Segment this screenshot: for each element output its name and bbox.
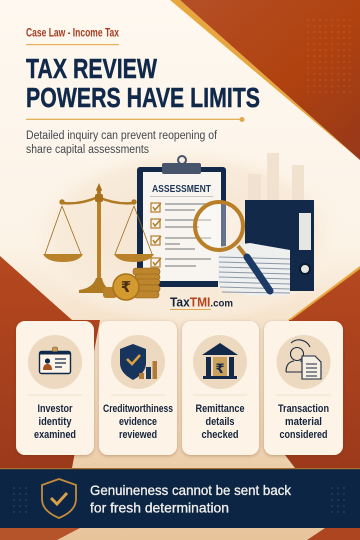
label: checked <box>202 429 238 441</box>
label <box>34 403 76 441</box>
label: Transaction <box>278 403 329 415</box>
icon: person and document <box>276 335 330 389</box>
subtitle <box>26 130 218 156</box>
label: Remittance <box>196 403 244 415</box>
icon: coins with rupee: ₹ <box>121 278 131 296</box>
icon: coins with rupee <box>103 268 160 300</box>
panel: remittance <box>182 321 259 455</box>
corner: bottom right orange <box>307 528 360 540</box>
banner text: Genuineness cannot be sent back <box>90 482 292 498</box>
divider <box>193 394 247 396</box>
corner: lower left orange shape <box>0 256 100 468</box>
label: material <box>285 416 322 428</box>
label: considered <box>280 429 328 441</box>
icon: clipboard checklist <box>137 156 226 287</box>
icon: magnifying glass <box>195 202 270 291</box>
banner <box>0 468 360 528</box>
icon: id card <box>28 335 82 389</box>
eyebrow label: Case Law - Income Tax <box>26 28 119 40</box>
icon: shield check <box>42 479 76 518</box>
panel: investor identity <box>16 321 94 455</box>
eyebrow underline <box>26 44 119 45</box>
banner text <box>90 482 292 516</box>
subtitle: Detailed inquiry can prevent reopening of <box>26 130 218 142</box>
corner: bottom left orange <box>0 528 80 540</box>
corner: top right orange triangle <box>170 0 360 160</box>
label <box>103 403 173 441</box>
title <box>26 53 260 113</box>
title: POWERS HAVE LIMITS <box>26 82 260 113</box>
label: identity <box>38 416 72 428</box>
icon: bank with rupee: ₹ <box>215 362 225 377</box>
label: Creditworthiness <box>103 403 173 415</box>
corner: lower right orange shape <box>285 266 360 468</box>
divider <box>111 394 165 396</box>
icon: blue binder <box>245 200 314 291</box>
icon: balance scale <box>43 183 154 293</box>
icon: stack of papers <box>218 243 290 296</box>
icon: shield and bars <box>111 335 165 389</box>
background bars <box>248 153 304 204</box>
label: evidence <box>119 416 157 428</box>
logo: TaxTMI.com: TaxTMI.com <box>170 294 233 310</box>
panel: creditworthiness <box>99 321 177 455</box>
label: examined <box>34 429 76 441</box>
label: Investor <box>38 403 73 415</box>
label: details <box>206 416 234 428</box>
subtitle: share capital assessments <box>26 144 149 156</box>
label: reviewed <box>119 429 157 441</box>
label <box>278 403 329 441</box>
title rule with dot <box>26 117 244 122</box>
panel: transaction <box>264 321 343 455</box>
divider <box>276 394 331 396</box>
banner text: for fresh determination <box>90 500 229 516</box>
label <box>196 403 244 441</box>
icon: clipboard checklist: ASSESSMENT <box>152 183 211 195</box>
title: TAX REVIEW <box>26 53 157 84</box>
divider <box>28 394 82 396</box>
